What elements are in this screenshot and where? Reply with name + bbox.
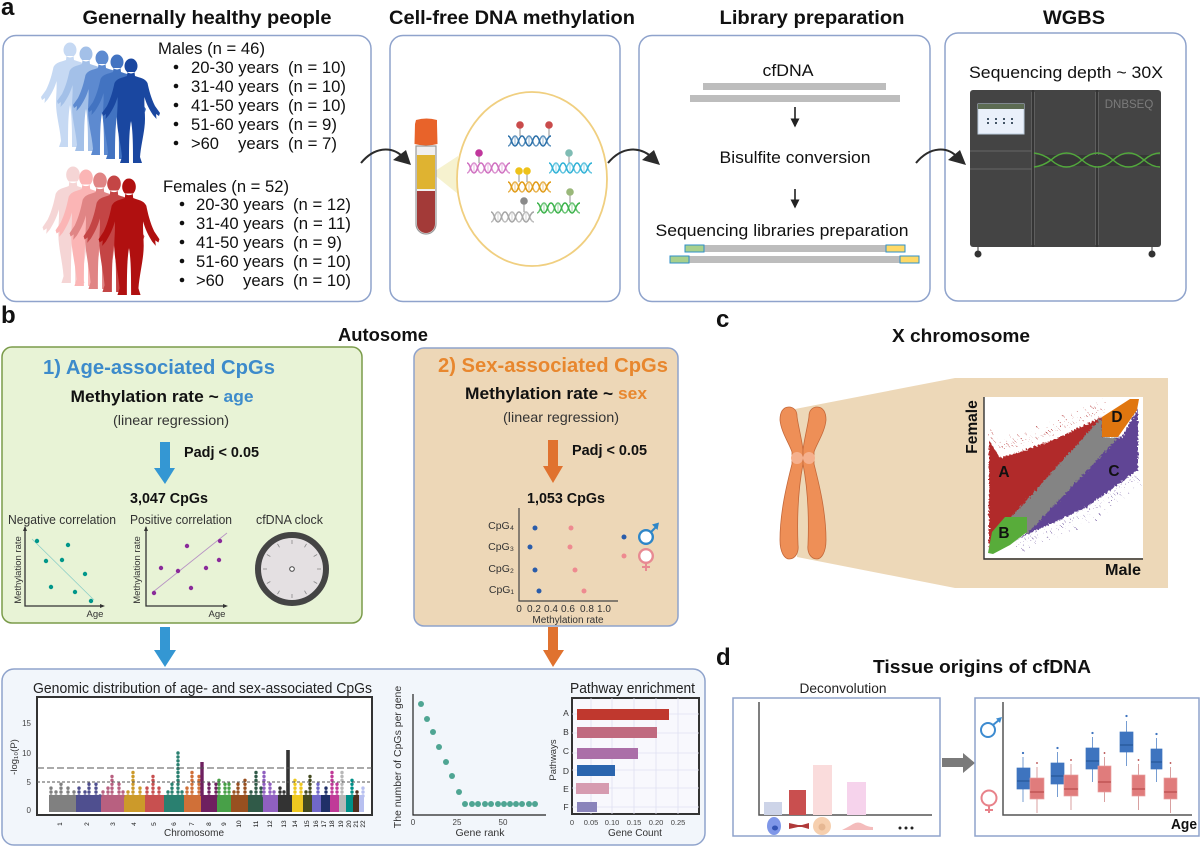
heading: age-associated: 1) Age-associated CpGs	[43, 356, 275, 379]
chart: methylation dot plot: 0	[516, 604, 522, 615]
panel: sex-associated CpGs	[414, 348, 678, 626]
heading: WGBS: WGBS	[1043, 7, 1105, 29]
icon: adapter-ligated fragments	[670, 245, 919, 263]
label: b: b	[1, 302, 16, 329]
chart: Manhattan plot: 17	[321, 820, 328, 828]
text: padj age: Padj < 0.05	[184, 445, 259, 461]
panel: library preparation	[639, 36, 930, 302]
text: 3,047 CpGs: 3,047 CpGs	[130, 491, 208, 507]
text block: males: (n = 10)	[288, 97, 346, 115]
chart: pathway enrichment: 0.10	[605, 818, 619, 827]
chart: Manhattan plot: 9	[221, 822, 228, 826]
icon: male ageing silhouettes	[41, 42, 160, 163]
chart: methylation dot plot: 0.4	[544, 604, 558, 615]
chart: Manhattan plot: 12	[267, 820, 274, 828]
icon: cell types	[767, 817, 914, 835]
chart: negative correlation: Methylation rate	[13, 536, 24, 604]
chart: Manhattan plot: 14	[292, 820, 299, 828]
arrow: deconvolution to age	[942, 753, 975, 773]
chart: pathway enrichment: Gene Count	[608, 828, 662, 839]
icon: zoom circle	[457, 92, 607, 266]
chart: methylation dot plot: Methylation rate	[532, 615, 604, 626]
text block: males: (n = 9)	[288, 116, 337, 134]
chart: CpGs per gene rank: 25	[453, 818, 462, 827]
text block: males: >60	[191, 135, 219, 153]
panel: deconvolution bars	[733, 698, 940, 836]
chart: female vs male scatter: Male	[1105, 562, 1141, 579]
text block: females	[163, 178, 351, 290]
panel: X chromosome zoom	[780, 378, 1168, 588]
text: sequencing depth: Sequencing depth ~ 30X	[969, 64, 1163, 82]
zoom wedge	[795, 378, 1168, 588]
text block: females: years	[243, 272, 284, 290]
icon: cfDNA fragments	[690, 83, 900, 102]
text block: females: Females (n = 52)	[163, 178, 289, 196]
text block: females: 20-30 years	[196, 196, 284, 214]
chart: pathway enrichment: 0.25	[671, 818, 685, 827]
chart: CpGs per gene rank	[392, 686, 546, 839]
chart: Manhattan plot: 4	[131, 822, 138, 826]
chart: Manhattan plot: 1	[57, 822, 64, 826]
chart: Manhattan plot: 5	[27, 778, 32, 787]
chart: pathway enrichment: 0.20	[649, 818, 663, 827]
text: padj sex: Padj < 0.05	[572, 443, 647, 459]
chart: CpGs per gene rank: The number of CpGs per gene	[392, 686, 404, 828]
chart: positive correlation: Positive correlation	[130, 513, 232, 527]
chart: Manhattan plot: 13	[281, 820, 288, 828]
icon: blood tube	[414, 118, 438, 234]
chart: negative correlation	[8, 513, 116, 620]
panel: WGBS	[945, 33, 1186, 301]
text block: males: 20-30 years	[191, 59, 279, 77]
panel: cell-free DNA methylation	[390, 36, 620, 302]
chart: female vs male scatter: C	[1108, 463, 1120, 480]
text block: females: (n = 11)	[293, 215, 351, 233]
text: linear regression: (linear regression)	[113, 412, 229, 428]
panel: genomic results	[2, 669, 705, 845]
chart: methylation dot plot: 0.8	[580, 604, 594, 615]
chart: methylation dot plot: CpG₁	[489, 584, 514, 596]
chart: Manhattan plot: 10	[236, 820, 243, 828]
text block: males: (n = 10)	[288, 78, 346, 96]
text: model formula sex: Methylation rate ~ sex	[465, 384, 648, 403]
text block: females: (n = 10)	[293, 253, 351, 271]
text block: males: 41-50 years	[191, 97, 279, 115]
chart: Manhattan plot: 19	[338, 820, 345, 828]
text block: females: (n = 9)	[293, 234, 342, 252]
icon: methylated DNA fragments	[467, 121, 592, 222]
panel: cohort	[3, 36, 371, 302]
text: age axis: Age	[1171, 817, 1197, 833]
chart: Manhattan plot: 20	[346, 820, 353, 828]
chart: Manhattan plot	[9, 681, 372, 839]
chart: box plots by age and sex	[1017, 715, 1177, 813]
chart: negative correlation: Age	[87, 609, 103, 620]
chart: Manhattan plot: 7	[189, 822, 196, 826]
chart: female vs male scatter: A	[998, 464, 1010, 481]
arrow: age to genomic panel	[154, 627, 176, 667]
text block: males: Males (n = 46)	[158, 40, 265, 58]
chart: female vs male scatter	[964, 397, 1143, 579]
chart: CpGs per gene rank: 0	[411, 818, 416, 827]
chart: methylation dot plot: CpG₃	[488, 541, 514, 553]
chart: pathway enrichment: C	[563, 746, 569, 756]
heading: Cell-free DNA methylation: Cell-free DNA methylation	[389, 7, 635, 29]
text block: males	[158, 40, 346, 153]
arrow: blood to library	[608, 150, 660, 165]
heading: Genernally healthy people: Genernally healthy people	[82, 7, 332, 29]
text: sequencing libraries preparation: Sequencing libraries preparation	[656, 222, 908, 240]
chart: female vs male scatter: Female	[964, 400, 981, 454]
chart: pathway enrichment: A	[563, 708, 569, 718]
panel: age-associated CpGs	[2, 347, 362, 623]
heading: tissue origins: Tissue origins of cfDNA	[873, 657, 1091, 677]
chart: Manhattan plot: Chromosome	[164, 828, 224, 839]
chart: Manhattan plot: 5	[151, 822, 158, 826]
chart: pathway enrichment	[548, 680, 699, 839]
chart: methylation dot plot: 1.0	[597, 604, 611, 615]
chart: positive correlation: Methylation rate	[132, 536, 143, 604]
chart: female vs male scatter: B	[998, 525, 1010, 542]
chart: pathway enrichment: 0.05	[584, 818, 598, 827]
chart: positive correlation	[130, 513, 232, 620]
chart: Manhattan plot: Genomic distribution of age- and sex-associated CpGs	[33, 681, 372, 697]
icon: zoom wedge	[432, 156, 458, 194]
text: model formula age: Methylation rate ~ age	[70, 387, 254, 406]
text block: females: (n = 12)	[293, 196, 351, 214]
chart: Manhattan plot: 0	[27, 806, 32, 815]
chart: methylation dot plot: CpG₂	[488, 563, 514, 575]
arrow: to bisulfite	[794, 107, 796, 126]
icon: chromosome	[780, 407, 826, 559]
text block: females: 51-60 years	[196, 253, 284, 271]
chart: Manhattan plot: 8	[206, 822, 213, 826]
icon: female ageing silhouettes	[43, 166, 159, 295]
chart: methylation dot plot: 0.6	[561, 604, 575, 615]
chart: Manhattan plot: 21	[353, 820, 360, 828]
text block: males: 51-60 years	[191, 116, 279, 134]
arrow: blue threshold	[154, 442, 175, 484]
icon: DNBSEQ sequencer	[970, 90, 1161, 258]
chart: pathway enrichment: F	[563, 802, 569, 812]
label: c: c	[716, 306, 729, 333]
arrow: library to WGBS	[916, 150, 966, 165]
chart: positive correlation: Age	[209, 609, 225, 620]
label: d: d	[716, 644, 731, 671]
chart: pathway enrichment: E	[563, 784, 569, 794]
chart: Manhattan plot: -log₁₀(P)	[9, 739, 20, 775]
chart: Manhattan plot: 16	[313, 820, 320, 828]
panel: tissue by age and sex	[975, 698, 1199, 836]
arrow: to libraries	[794, 189, 796, 207]
text: bisulfite conversion: Bisulfite conversion	[720, 149, 870, 167]
chart: CpGs per gene rank: Gene rank	[455, 827, 505, 839]
icon: male symbol	[981, 717, 1002, 737]
text: cfDNA: cfDNA	[762, 62, 814, 80]
chart: Manhattan plot: 10	[22, 749, 32, 758]
chart: CpGs per gene rank: 50	[499, 818, 508, 827]
icon: cfDNA clock: cfDNA clock	[256, 513, 324, 527]
heading: X chromosome: X chromosome	[892, 326, 1030, 346]
text block: females: >60	[196, 272, 224, 290]
chart: pathway enrichment: D	[563, 766, 569, 776]
chart: methylation dot plot: CpG₄	[488, 520, 514, 532]
chart: female vs male scatter: D	[1111, 409, 1123, 426]
chart: pathway enrichment: B	[563, 727, 569, 737]
text block: males: (n = 7)	[288, 135, 337, 153]
chart: Manhattan plot: 18	[329, 820, 336, 828]
icon: female symbol	[982, 790, 996, 813]
chart: methylation dot plot: 0.2	[527, 604, 541, 615]
chart: Manhattan plot: 22	[360, 820, 367, 828]
text block: males: (n = 10)	[288, 59, 346, 77]
chart: Manhattan plot: 2	[84, 822, 91, 826]
chart: pathway enrichment: 0	[570, 818, 574, 827]
chart: Manhattan plot: 3	[110, 822, 117, 826]
heading: Library preparation: Library preparation	[720, 7, 904, 29]
chart: Manhattan plot: 11	[253, 820, 260, 827]
chart: pathway enrichment: Pathway enrichment	[570, 680, 696, 697]
text block: males: 31-40 years	[191, 78, 279, 96]
heading: Autosome: Autosome	[338, 325, 428, 345]
text: deconvolution: Deconvolution	[800, 681, 886, 696]
heading: sex-associated: 2) Sex-associated CpGs	[438, 354, 668, 377]
chart: negative correlation: Negative correlation	[8, 513, 116, 527]
chart: Manhattan plot: 6	[171, 822, 178, 826]
text block: females: 31-40 years	[196, 215, 284, 233]
legend: sex symbols	[622, 522, 659, 571]
text block: females: (n = 10)	[293, 272, 351, 290]
arrow: orange threshold	[543, 440, 563, 483]
text block: females: 41-50 years	[196, 234, 284, 252]
icon: DNBSEQ sequencer: DNBSEQ	[1105, 99, 1153, 111]
chart: pathway enrichment: 0.15	[627, 818, 641, 827]
icon: cfDNA clock	[256, 513, 326, 603]
arrow: sex to genomic panel	[543, 627, 564, 667]
text: linear regression: (linear regression)	[503, 409, 619, 425]
chart: methylation dot plot	[488, 508, 618, 626]
chart: Manhattan plot: 15	[304, 820, 311, 828]
text block: males: years	[238, 135, 279, 153]
arrow: cohort to blood	[361, 150, 411, 165]
chart: Manhattan plot: 15	[22, 719, 32, 728]
chart: pathway enrichment: Pathways	[548, 739, 559, 781]
text: 1,053 CpGs: 1,053 CpGs	[527, 491, 605, 507]
